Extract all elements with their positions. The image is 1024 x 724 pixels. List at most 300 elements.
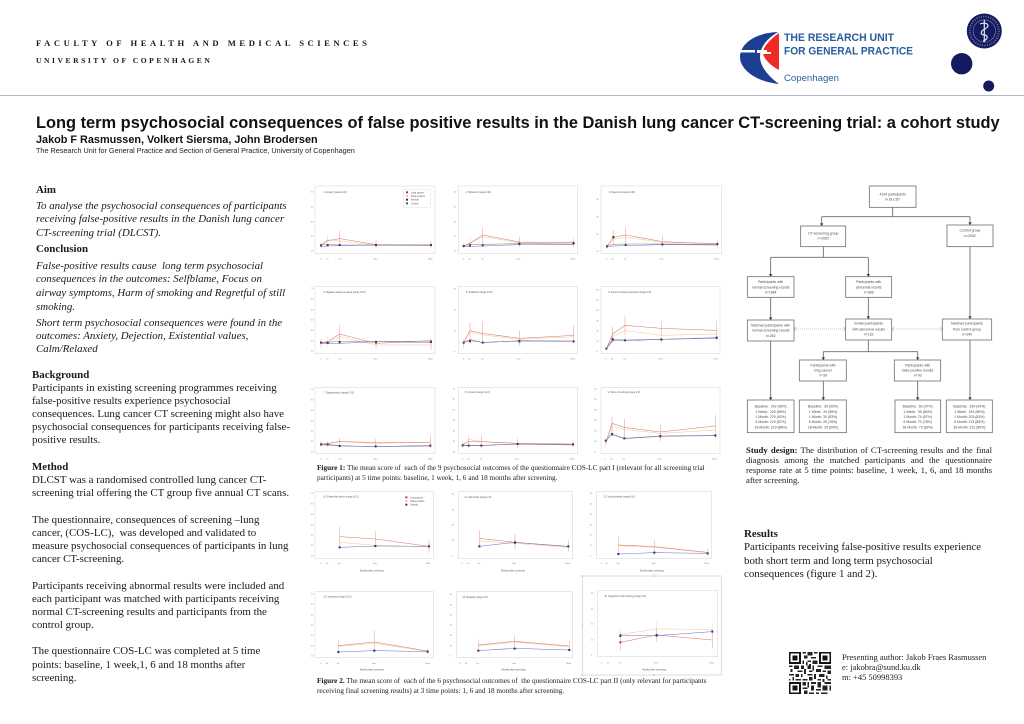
box: abnormal results [846,277,892,297]
chart 1: anxiety: 30 [311,221,314,223]
chart 13: impotence: 0 [320,663,322,665]
box: response rates lung cancer [799,400,846,433]
conclusion text: short term: Calm/Relaxed [36,343,98,355]
box: matched control: from control group [953,327,981,331]
header: faculty name: FACULTY OF HEALTH AND MEDICAL SCIENCES [36,38,370,48]
chart 8: introvert: 50 [453,409,456,411]
chart 1: anxiety: 40 [311,207,314,209]
chart 7: stigmatization: 30 [311,431,314,433]
chart 4: negative biased on ideas: 20 [311,340,314,342]
text block: background and method: each participant was matched with participants receiving [32,593,279,605]
chart 6: focus on airway symptoms: 10 [596,341,599,343]
chart 12: social network: 40 [590,514,593,516]
text block: background and method: Background [32,368,89,380]
chart 3: dejection [596,186,722,261]
flowchart connectors and arrows [769,207,972,400]
chart 3: dejection: 10 [596,251,599,253]
chart 9: harm of smoking: 0 [594,451,596,453]
chart 7: stigmatization: 20 [311,441,314,443]
chart 10: existential values: 40 [311,524,314,526]
logo: research unit for general practice [740,32,913,84]
chart 14: empathy: 0 [459,663,461,665]
box: response rates normal [747,400,794,433]
chart 10: existential values: 20 [311,545,314,547]
text block: background and method: cancer, (COS-LC), was developed and validated to [32,527,256,539]
chart 6: focus on airway symptoms: 0 [596,351,598,353]
chart 14: empathy: 1m [476,663,479,665]
chart 10: existential values: 6mo [373,563,378,565]
chart 7: stigmatization: 18mo [428,459,434,461]
aim text: To analyse the psychosocial consequences of participants [36,200,287,212]
chart 4: negative biased on ideas: 6mo [373,359,378,361]
chart 4: negative biased on ideas: 18mo [428,359,434,361]
box: response rates false positive: Baseline: 60 (97%) [903,405,933,409]
chart 11: calm relaxed: 10 [452,540,455,542]
logo: research unit for general practice: Copenhagen [784,73,839,84]
chart 10: existential values: 30 [311,535,314,537]
text block: results: Results [744,528,778,540]
text block: results [744,528,981,580]
box: false positive: n=93 [914,374,922,378]
chart 12: social network: 0 [601,563,603,565]
chart group: figure 2, six line charts [311,492,722,676]
chart 3: dejection: 20 [596,234,599,236]
chart 5: selfblame: 1m [481,359,484,361]
chart 11: calm relaxed: 0 [452,555,454,557]
chart 9: harm of smoking: 50 [594,399,597,401]
chart 9: harm of smoking: 10 [594,441,597,443]
text block: background and method: Participants receiving abnormal results were included and [32,580,284,592]
chart 5: selfblame [454,287,578,361]
chart 14: empathy: 50 [450,604,453,606]
chart 15: regretful of still smoking: 1w [606,662,609,664]
chart 10: existential values: 10 [311,555,314,557]
box: response rates control: 1 Month: 203 (83%) [954,415,984,419]
chart 13: impotence: 13. Impotency (range 0-12) [323,595,352,598]
chart 9: harm of smoking: 6mo [658,459,662,461]
box: ct-screening group: CT-screening group [808,231,839,235]
chart 9: harm of smoking: 1w [610,459,613,461]
text block: background and method: normal CT-screening results and participants from the [32,606,267,618]
chart 14: empathy [450,592,573,672]
chart 12: social network: 18mo [704,563,710,565]
chart 1: anxiety: Control [411,202,419,205]
box: response rates false positive [895,400,941,433]
chart 1: anxiety: 1m [338,259,341,261]
box: response rates lung cancer: Baseline: 35 (90%) [808,405,838,409]
box: matched normal: n=252 [766,334,776,338]
box: control group: n=2052 [964,234,976,238]
box: false positive: false positive results [902,368,933,372]
chart 10: existential values: Normal [410,504,418,507]
text block: background and method: control group. [32,619,94,631]
chart 6: focus on airway symptoms [596,287,720,361]
box: normal results: n=1684 [765,291,777,295]
chart 10: existential values: 50 [311,514,314,516]
chart 1: anxiety: Lung cancer [411,191,424,194]
box: response rates normal: Baseline: 242 (96%) [755,405,787,409]
box: response rates control: 1 Week: 181 (89%) [954,410,985,414]
logo: research unit for general practice: THE RESEARCH UNIT [784,32,894,44]
chart 4: negative biased on ideas: 60 [311,299,314,301]
chart 5: selfblame: 10 [454,330,457,332]
text block: presenting author contact: m: +45 50998393 [842,672,902,682]
chart 8: introvert: 20 [453,441,456,443]
chart 9: harm of smoking: 30 [594,420,597,422]
chart 5: selfblame: 0 [463,359,465,361]
chart 4: negative biased on ideas [311,287,435,361]
chart 15: regretful of still smoking: 15. Regretful of still smoking (range 0-8) [604,595,646,598]
text block: aim and conclusion [36,184,287,355]
chart 3: dejection: 1w [611,259,614,261]
chart 3: dejection: 1m [624,259,627,261]
chart 7: stigmatization [311,387,435,461]
chart 12: social network: 12. Social network (range 0-8) [603,495,635,498]
box: invited abnormal: Invited participants [854,322,883,326]
chart 13: impotence: 10 [311,656,314,658]
authors: Jakob F Rasmussen, Volkert Siersma, John Brodersen [36,134,318,146]
chart 6: focus on airway symptoms: 40 [596,310,599,312]
chart 8: introvert: 10 [453,451,456,453]
chart 1: anxiety: 10 [311,251,314,253]
box: response rates false positive: 1 Month: 74 (87%) [903,415,932,419]
text block: results: Participants receiving false-positive results experience [744,541,981,553]
aim heading: Aim [36,184,56,196]
chart 3: dejection: 6mo [660,259,664,261]
box: matched normal: normal screening results [752,329,790,333]
chart 12: social network: 50 [590,503,593,505]
box: matched control: Matched participants [951,322,983,326]
chart 1: anxiety: Normal [411,199,419,202]
chart 12: social network: 30 [590,524,593,526]
chart 6: focus on airway symptoms: 6mo [659,359,663,361]
chart group: figure 1, nine line charts [311,186,722,461]
caption: figure 2 [317,677,707,695]
chart 10: existential values: False positive [410,500,425,503]
box: false positive [894,360,941,381]
chart 2: behavior: 10 [454,251,457,253]
chart 4: negative biased on ideas: 1m [338,359,341,361]
chart 4: negative biased on ideas: 1w [326,359,329,361]
chart 7: stigmatization: 40 [311,420,314,422]
header: university name: UNIVERSITY OF COPENHAGEN [36,56,212,65]
chart 15: regretful of still smoking: 0 [601,662,603,664]
chart 11: calm relaxed: 1m [478,563,481,565]
chart 12: social network: 20 [590,535,593,537]
text block: background and method: screening. [32,672,76,684]
box: invited abnormal: with abnormal results [852,327,885,331]
logo: research unit for general practice: FOR GENERAL PRACTICE [784,46,913,58]
box: response rates normal: 1 Week: 225 (89%) [755,410,786,414]
text block: background and method: cancer CT-screening. [32,553,124,565]
chart 14: empathy: 40 [450,614,453,616]
header rule [0,94,1024,96]
chart 15: regretful of still smoking [591,591,718,672]
caption: figure 2: receiving final screening results) at 3 time points: 1, 6 and 18 months after screening. [317,687,564,695]
box: response rates control: 6 Month: 213 (86%) [954,420,984,424]
chart 14: empathy: 30 [450,625,453,627]
box: invited abnormal: n=132 [864,333,874,337]
chart 1: anxiety: 18mo [428,259,434,261]
chart 2: behavior: 2. Behavior (range 0-21) [466,191,491,194]
chart 14: empathy: 1w [465,663,468,665]
chart 15: regretful of still smoking: 40 [591,593,594,595]
chart 8: introvert: 0 [462,459,464,461]
chart 15: regretful of still smoking: 0 [591,655,593,657]
box: normal results [747,277,794,297]
text block: background and method: positive results. [32,434,100,446]
box: all participants: 4104 participants [880,192,906,196]
chart 2: behavior: 0 [463,259,465,261]
chart 15: regretful of still smoking: 20 [591,624,594,626]
chart 6: focus on airway symptoms: 0 [605,359,607,361]
caption: figure 2: Figure 2. The mean score of each of the 6 psychosocial outcomes of the questionnaire COS-LC part II (only relevant for participants [317,677,707,685]
chart 1: anxiety: 1w [326,259,329,261]
chart 14: empathy: 20 [450,635,453,637]
chart 13: impotence: 50 [311,614,314,616]
chart 2: behavior: 50 [454,192,457,194]
box: all participants: in DLCST [885,197,901,201]
text block: background and method: measure psychosocial consequences of participants in lung [32,540,288,552]
chart 15: regretful of still smoking: 6mo [654,662,659,664]
aim text: receiving false-positive results in the Danish lung cancer [36,213,284,225]
chart 13: impotence: Months after screening [360,669,384,672]
box: matched control [942,319,992,340]
chart 2: behavior: 40 [454,207,457,209]
chart 15: regretful of still smoking: 18mo [709,662,715,664]
chart 11: calm relaxed: 40 [452,494,455,496]
box: control group [947,225,993,247]
chart 10: existential values: 0 [320,563,322,565]
box: lung cancer: n=39 [819,374,827,378]
conclusion text: long term [36,260,285,313]
chart 10: existential values: 10. Existential values (range 0-12) [323,495,359,498]
chart 12: social network: 10 [590,545,593,547]
chart 15: regretful of still smoking: 1m [619,662,622,664]
box: abnormal results: Participants with [856,280,881,284]
chart 7: stigmatization: 70 [311,389,314,391]
chart 14: empathy: 0 [450,656,452,658]
chart 10: existential values: 1m [338,563,341,565]
chart 4: negative biased on ideas: 4. Negative biased on ideas (range 0-15) [323,291,366,294]
chart 9: harm of smoking: 0 [605,459,607,461]
chart 5: selfblame: 30 [454,288,457,290]
chart 14: empathy: Months after screening [502,669,526,672]
chart 4: negative biased on ideas: 0 [320,359,322,361]
icon: qr code [789,652,831,694]
chart 13: impotence: 1m [337,663,340,665]
chart 10: existential values: Lung cancer [410,496,423,499]
text block: background and method: The questionnaire COS-LC was completed at 5 time [32,645,260,657]
box: normal results: Participants with [758,280,783,284]
text block: results: both short term and long term psychosocial [744,555,933,567]
chart 1: anxiety: 6mo [373,259,378,261]
box: response rates lung cancer: 18 Month: 25 (69%) [808,425,838,429]
chart 3: dejection: 18mo [714,259,720,261]
chart 11: calm relaxed: 18mo [565,563,571,565]
box: ct-screening group [801,226,846,247]
text block: background and method: Method [32,461,68,473]
caption: figure 1: Figure 1: The mean score of each of the 9 psychosocial outcomes of the questionnaire COS-LC part I (relevant for all screening trial [317,464,705,472]
chart 3: dejection: 30 [596,217,599,219]
chart 9: harm of smoking: 1m [622,459,625,461]
chart 10: existential values: Months after screening [360,569,384,572]
chart 8: introvert [453,387,578,461]
box: matched normal: Matched participants with [751,323,790,327]
box: matched normal [747,320,794,341]
caption: figure 1: participants) at 5 time points: baseline, 1 week, 1, 6 and 18 months after screening. [317,474,557,482]
chart 14: empathy: 18mo [566,663,572,665]
chart 2: behavior: 20 [454,236,457,238]
chart 6: focus on airway symptoms: 6. Focus on airway symptoms (range 0-6) [608,291,652,294]
aim text: CT-screening trial (DLCST). [36,227,161,239]
box: normal results: normal screening results [752,285,790,289]
conclusion text: long term: False-positive results cause long term psychosocial [36,260,263,272]
box: all participants [869,186,916,207]
box: response rates false positive: 6 Month: 70 (78%) [903,420,932,424]
box: abnormal results: abnormal results [856,285,882,289]
chart 14: empathy: 14. Empathy (range 0-8) [462,596,488,599]
box: response rates control: Baseline: 234 (94%) [953,405,985,409]
box: response rates lung cancer: 6 Month: 28 (78%) [809,420,837,424]
box: matched control: n=249 [962,333,972,337]
icon: university seal and dots [951,14,1002,92]
chart 8: introvert: 60 [453,399,456,401]
chart 12: social network: 1w [605,563,608,565]
chart 12: social network: 0 [590,555,592,557]
chart 8: introvert: 8. Introvert (range 0-12) [465,391,490,394]
chart 11: calm relaxed [452,492,573,572]
title: Long term psychosocial consequences of false positive results in the Danish lung cancer CT-screening trial: a cohort study [36,114,1000,132]
box: response rates control [946,400,992,433]
chart 13: impotence: 30 [311,635,314,637]
chart 5: selfblame: 0 [454,351,456,353]
box: response rates control: 18 Month: 221 (89%) [953,425,985,429]
chart 12: social network: Months after screening [640,569,664,572]
chart 12: social network [590,492,712,572]
selection frame around chart 15 [582,575,722,676]
text block: presenting author contact [842,652,986,682]
chart 11: calm relaxed: 20 [452,525,455,527]
box: response rates normal: 1 Month: 229 (92%) [756,415,786,419]
chart 13: impotence: 60 [311,604,314,606]
chart 4: negative biased on ideas: 50 [311,309,314,311]
chart 12: social network: 1m [617,563,620,565]
box: lung cancer [799,360,846,381]
chart 12: social network: 6mo [652,563,656,565]
chart 9: harm of smoking: 20 [594,430,597,432]
text block: background and method: points: baseline, 1 week,1, 6 and 18 months after [32,659,245,671]
chart 11: calm relaxed: 30 [452,509,455,511]
box: ct-screening group: n=2052 [818,236,829,240]
chart 2: behavior: 18mo [570,259,576,261]
chart 14: empathy: 6mo [512,663,517,665]
chart 3: dejection: 0 [606,259,608,261]
chart 11: calm relaxed: 1w [466,563,469,565]
chart 1: anxiety: 1. Anxiety (range 0-21) [323,191,347,194]
box: false positive: Participants with [905,363,930,367]
chart 10: existential values: 70 [311,493,314,495]
conclusion text: short term: Short term psychosocial consequences were found in the [36,316,282,328]
chart 8: introvert: 6mo [515,459,520,461]
chart 7: stigmatization: 6mo [373,459,378,461]
chart 15: regretful of still smoking: 30 [591,609,594,611]
chart 6: focus on airway symptoms: 60 [596,289,599,291]
text block: background and method [32,368,290,684]
chart 1: anxiety: 0 [320,259,322,261]
box: response rates false positive: 18 Month: 73 (82%) [903,425,933,429]
box: response rates lung cancer: 1 Week: 29 (85%) [809,410,837,414]
chart 9: harm of smoking: 18mo [712,459,718,461]
chart 8: introvert: 40 [453,420,456,422]
conclusion text: short term [36,316,282,355]
text block: background and method: consequences. Lung cancer CT screening might also have [32,408,284,420]
box: response rates lung cancer: 1 Month: 30 (83%) [809,415,837,419]
chart 11: calm relaxed: 6mo [512,563,517,565]
box: invited abnormal [846,319,892,340]
chart 5: selfblame: 20 [454,310,457,312]
chart 14: empathy: 60 [450,594,453,596]
chart 6: focus on airway symptoms: 18mo [713,359,719,361]
chart 13: impotence: 70 [311,593,314,595]
text block: background and method: screening trial offering the CT group five annual CT scans. [32,487,289,499]
chart 7: stigmatization: 60 [311,399,314,401]
chart 6: focus on airway symptoms: 30 [596,320,599,322]
chart 2: behavior: 1m [481,259,484,261]
chart 1: anxiety [311,186,435,261]
chart 3: dejection: 3. Dejection (range 0-18) [609,191,635,194]
chart 4: negative biased on ideas: 10 [311,351,314,353]
chart 7: stigmatization: 10 [311,451,314,453]
chart 6: focus on airway symptoms: 1w [611,359,614,361]
chart 9: harm of smoking [594,387,720,461]
chart 11: calm relaxed: Months after screening [501,569,525,572]
conclusion text: long term: consequences in the outcomes: Selfblame, Focus on [36,273,262,285]
chart 4: negative biased on ideas: 70 [311,288,314,290]
chart 8: introvert: 1m [480,459,483,461]
text block: presenting author contact: Presenting author: Jakob Fraes Rasmussen [842,652,986,662]
box: abnormal results: n=368 [864,291,874,295]
chart 8: introvert: 1w [467,459,470,461]
conclusion text: short term: outcomes: Anxiety, Dejection, Existential values, [36,330,248,342]
chart 8: introvert: 30 [453,430,456,432]
box: response rates false positive: 1 Week: 55 (84%) [903,410,932,414]
chart 5: selfblame: 1w [468,359,471,361]
chart 1: anxiety: 20 [311,236,314,238]
text block: background and method: The questionnaire, consequences of screening –lung [32,514,259,526]
chart 6: focus on airway symptoms: 1m [623,359,626,361]
conclusion text: long term: airway symptoms, Harm of smoking and Regretful of still [36,287,285,299]
box: control group: Control group [960,229,981,233]
aim text [36,200,287,239]
chart 1: anxiety: False positive [411,195,426,198]
chart 13: impotence: 40 [311,625,314,627]
chart 15: regretful of still smoking: Months after screening [642,669,667,672]
caption: study design: Study design: The distribution of CT-screening results and the final diagnosis among the matched participants and the questionnaire response rate at 5 time points: baseline, 1 week, 1, 6, and 18 months after screening. [746,444,992,485]
chart 5: selfblame: 6mo [517,359,521,361]
chart 9: harm of smoking: 40 [594,410,597,412]
box: lung cancer: Participants with [810,363,836,367]
chart 10: existential values: 1w [326,563,329,565]
text block: background and method: psychosocial consequences for participants receiving false- [32,421,290,433]
chart 12: social network: 60 [590,493,593,495]
box: response rates normal: 18 Month: 219 (86%) [755,425,787,429]
chart 5: selfblame: 5. Selfblame (range 0-15) [466,291,493,294]
chart 15: regretful of still smoking: 10 [591,639,594,641]
text block: results: consequences (figure 1 and 2). [744,568,877,580]
chart 1: anxiety: 50 [311,192,314,194]
chart 2: behavior [454,186,578,261]
